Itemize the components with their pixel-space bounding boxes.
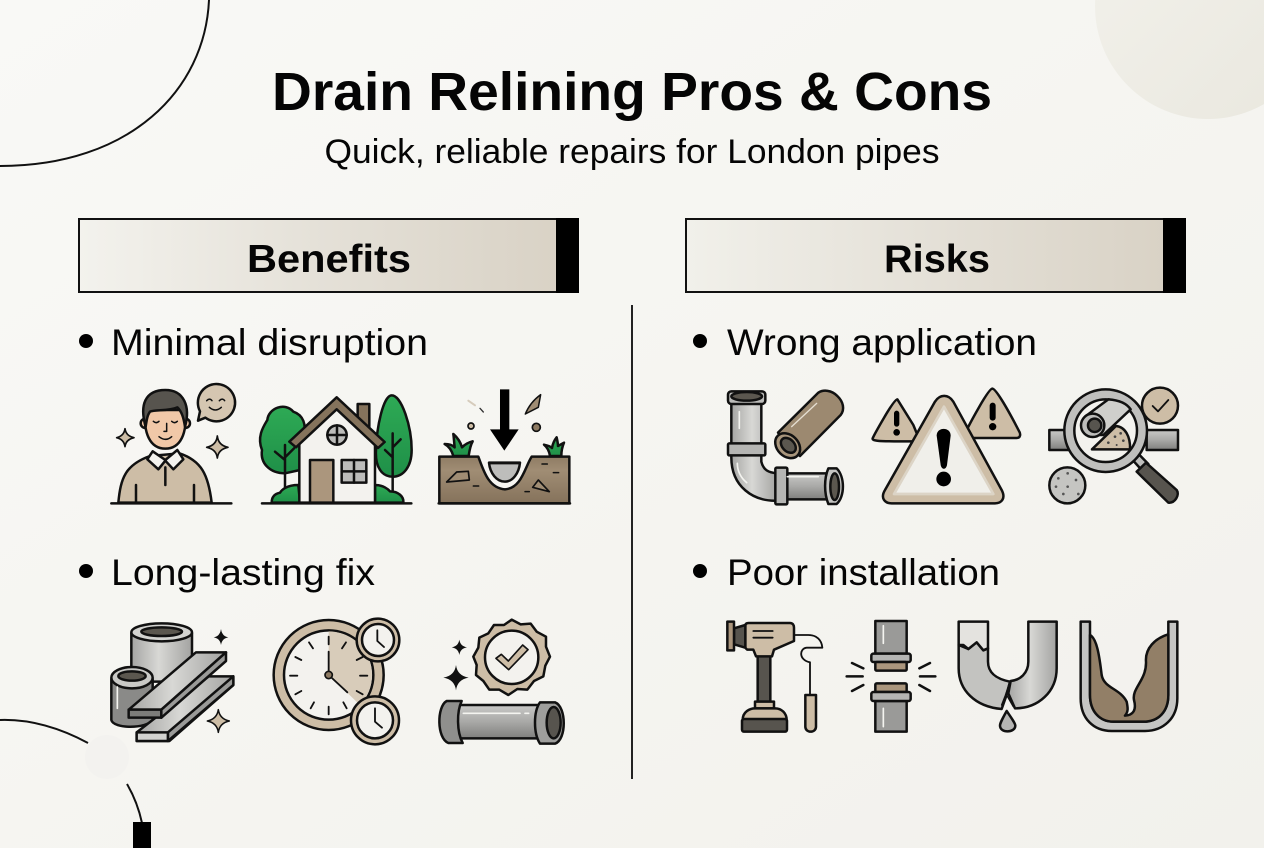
title: Drain Relining Pros & Cons — [272, 62, 992, 122]
panel: benefits header: Benefits — [247, 238, 411, 281]
panel: risks header: Risks — [884, 238, 990, 281]
risk: poor installation: Poor installation — [727, 552, 1000, 593]
risk: wrong application: Wrong application — [727, 322, 1037, 363]
icon: installation tool — [727, 622, 822, 732]
decoration: bottom-left arc — [0, 720, 151, 848]
icon: approved pipe — [439, 620, 564, 744]
decoration: top-left arc — [0, 0, 209, 166]
icon: inspection magnifier — [1049, 388, 1178, 503]
icon: small excavation — [439, 389, 570, 503]
benefit: long-lasting fix: Long-lasting fix — [111, 552, 376, 593]
benefit: minimal disruption: Minimal disruption — [111, 322, 428, 363]
decoration: top-right circle — [1095, 0, 1264, 119]
icons row: wrong application — [728, 388, 1178, 504]
icon: durable materials — [111, 623, 233, 741]
panel: risks header — [686, 218, 1186, 293]
icon: house with trees — [260, 395, 412, 503]
icon: warning triangles — [873, 389, 1020, 503]
icons row: minimal disruption — [111, 384, 570, 503]
panel: benefits header — [79, 218, 579, 293]
subtitle: Quick, reliable repairs for London pipes — [324, 133, 940, 171]
icons row: long-lasting fix — [111, 619, 564, 744]
icon: loose joint — [847, 621, 935, 732]
icons row: poor installation — [727, 621, 1177, 732]
icon: happy person — [111, 384, 235, 503]
icon: cracked u-bend — [959, 622, 1057, 731]
icon: blocked u-bend — [1081, 622, 1177, 731]
column divider — [631, 305, 633, 779]
icon: clock faces — [274, 619, 399, 744]
icon: mismatched pipes — [728, 391, 843, 504]
